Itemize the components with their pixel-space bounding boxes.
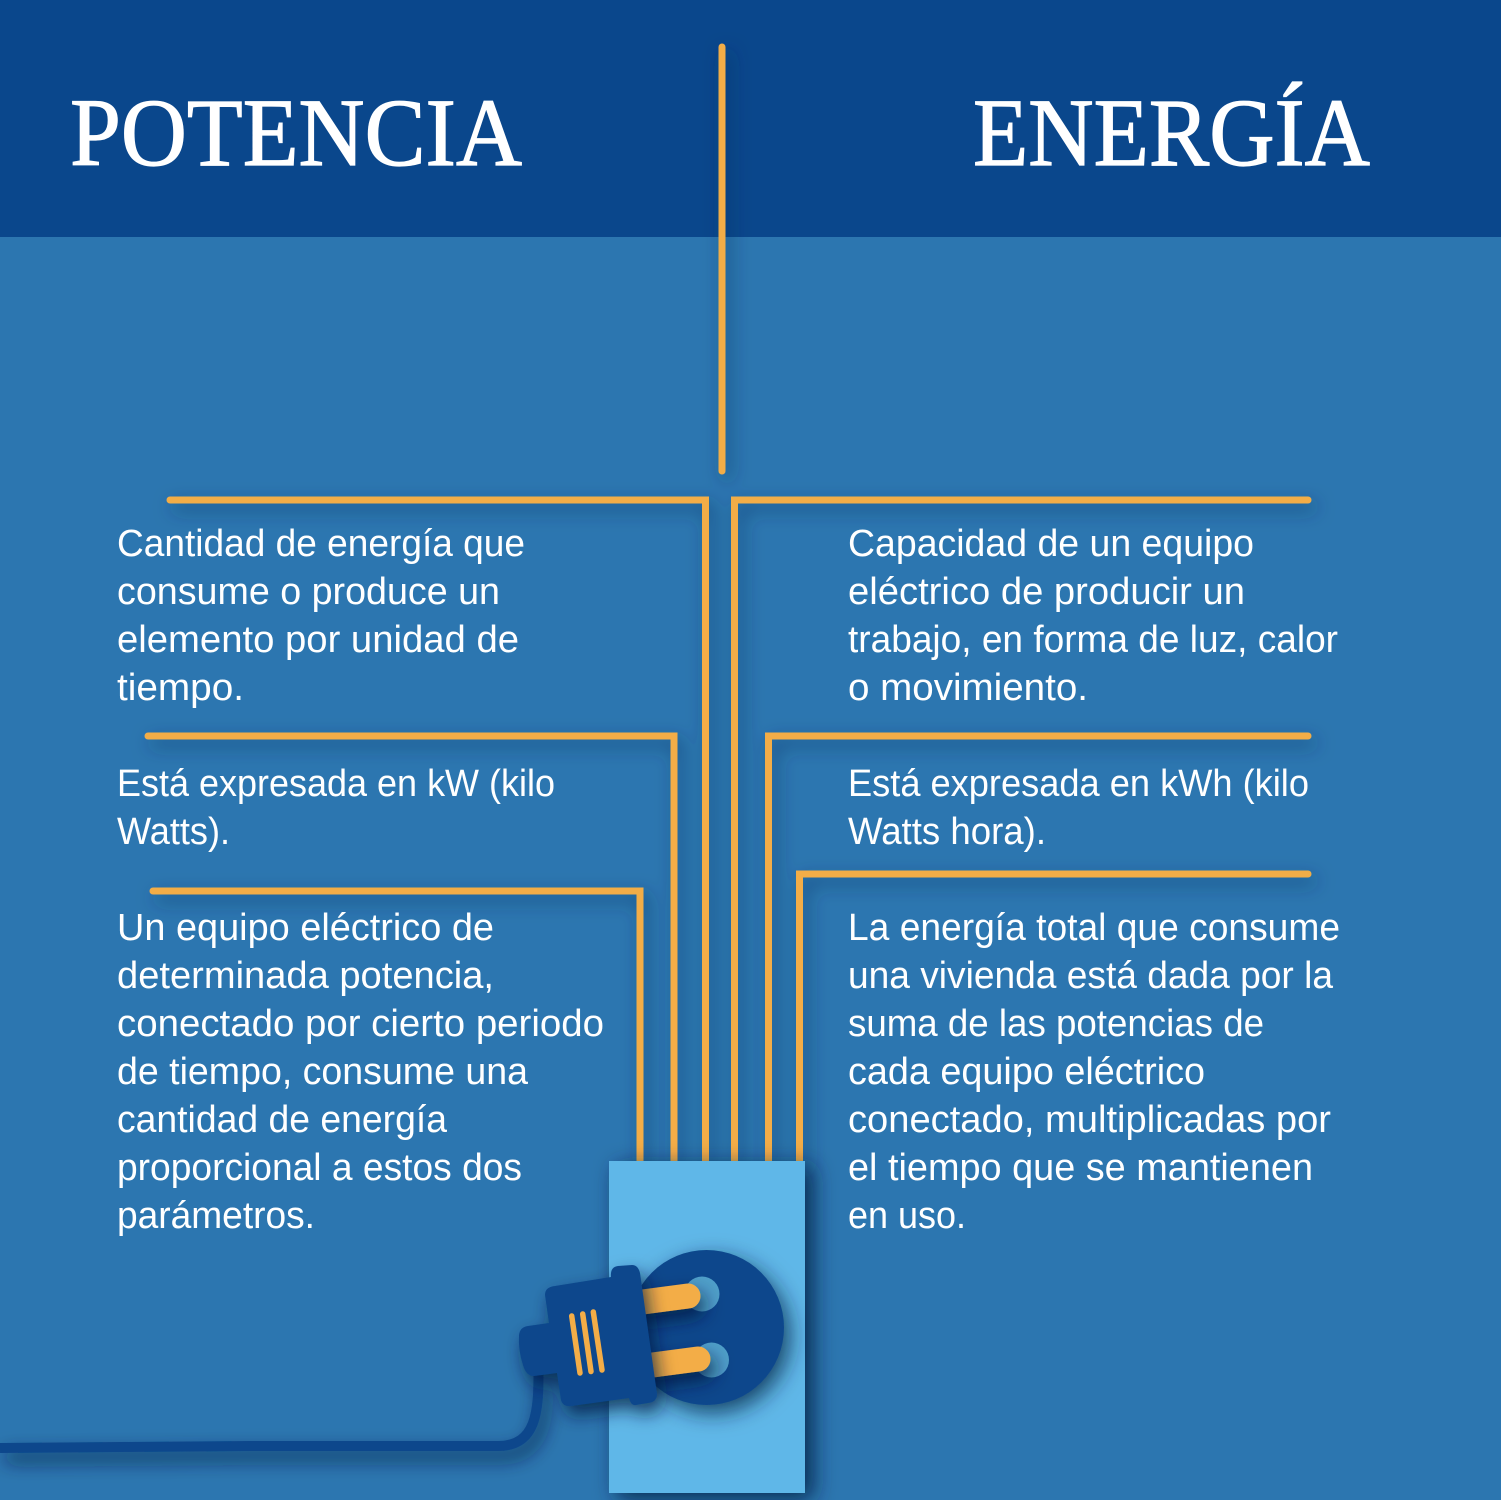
icon: wall outlet panel <box>609 1161 805 1493</box>
text block: energía example <box>848 907 1340 1237</box>
text block: energía unit <box>848 763 1309 853</box>
text block: potencia definition <box>117 523 525 709</box>
text block: energía unit: Está expresada en kWh (kilo <box>848 763 1309 805</box>
text block: potencia example: de tiempo, consume una <box>117 1051 529 1093</box>
text block: potencia example: conectado por cierto periodo <box>117 1003 604 1045</box>
heading: ENERGÍA: ENERGÍA <box>973 79 1370 186</box>
text block: potencia definition: tiempo. <box>117 667 244 709</box>
text block: potencia definition: elemento por unidad de <box>117 619 519 661</box>
text block: energía example: cada equipo eléctrico <box>848 1051 1205 1093</box>
text block: potencia unit <box>117 763 555 853</box>
text block: potencia example <box>117 907 604 1237</box>
text block: potencia example: Un equipo eléctrico de <box>117 907 494 949</box>
text block: energía definition: Capacidad de un equipo <box>848 523 1254 565</box>
icon: plug grip stripes <box>572 1312 602 1373</box>
icon: plug prongs <box>635 1296 698 1366</box>
text block: energía example: conectado, multiplicadas por <box>848 1099 1331 1141</box>
wires: orange connector lines <box>148 47 1308 1165</box>
icon: power cord <box>0 1372 538 1448</box>
text block: energía example: una vivienda está dada por la <box>848 955 1334 997</box>
text block: potencia example: parámetros. <box>117 1195 315 1237</box>
text block: potencia definition: consume o produce un <box>117 571 500 613</box>
text block: energía definition: trabajo, en forma de luz, calor <box>848 619 1338 661</box>
text block: energía unit: Watts hora). <box>848 811 1046 853</box>
icon: socket with holes <box>629 1250 784 1405</box>
text block: energía example: suma de las potencias de <box>848 1003 1264 1045</box>
text block: energía definition: o movimiento. <box>848 667 1088 709</box>
text block: energía example: La energía total que consume <box>848 907 1340 949</box>
text block: energía example: en uso. <box>848 1195 966 1237</box>
heading: POTENCIA: POTENCIA <box>70 79 522 186</box>
icon: plug body <box>519 1265 657 1406</box>
text block: energía definition <box>848 523 1338 709</box>
text block: potencia example: cantidad de energía <box>117 1099 448 1141</box>
text block: energía definition: eléctrico de producir un <box>848 571 1245 613</box>
text block: energía example: el tiempo que se mantienen <box>848 1147 1313 1189</box>
text block: potencia example: determinada potencia, <box>117 955 494 997</box>
text block: potencia unit: Está expresada en kW (kilo <box>117 763 555 805</box>
text block: potencia example: proporcional a estos dos <box>117 1147 522 1189</box>
text block: potencia definition: Cantidad de energía que <box>117 523 525 565</box>
text block: potencia unit: Watts). <box>117 811 230 853</box>
header band <box>0 0 1501 237</box>
